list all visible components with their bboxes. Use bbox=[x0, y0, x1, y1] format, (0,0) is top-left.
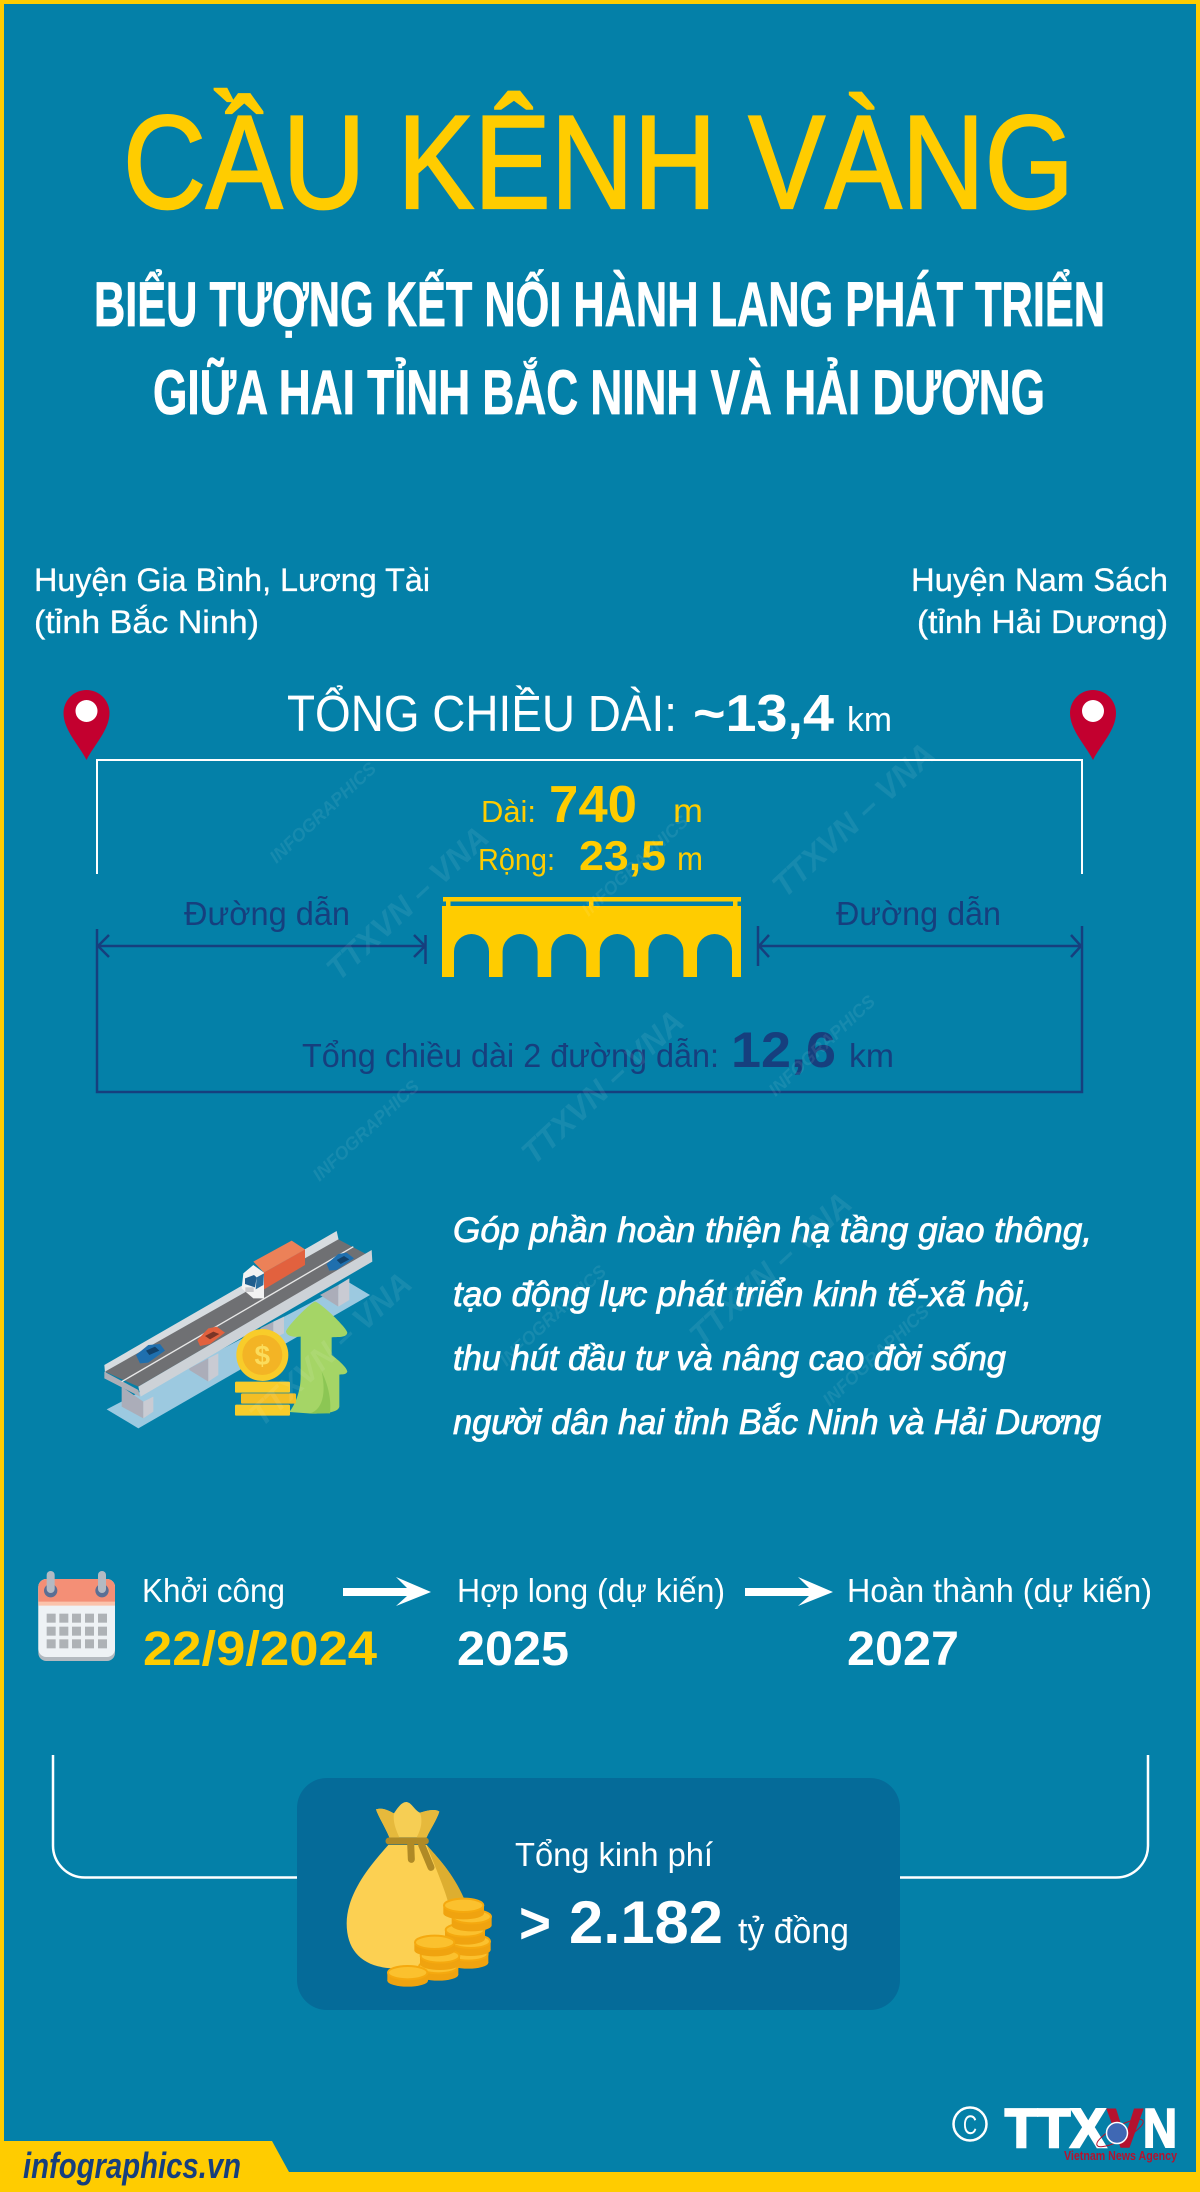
icon: right map pin bbox=[1070, 690, 1116, 760]
icon: left map pin bbox=[64, 690, 110, 760]
description text: người dân hai tỉnh Bắc Ninh và Hải Dương bbox=[453, 1403, 1102, 1442]
timeline: completion bbox=[847, 1572, 1152, 1676]
logo: TTXVN: Vietnam News Agency bbox=[1064, 2149, 1177, 2163]
approach total label: km bbox=[849, 1037, 894, 1074]
logo: TTXVN: TTX bbox=[1005, 2097, 1106, 2159]
approach total label bbox=[302, 1022, 894, 1078]
footer tab bbox=[0, 2141, 289, 2192]
total length bracket bbox=[97, 760, 1082, 874]
logo: TTXVN: N bbox=[1143, 2097, 1177, 2159]
bridge dimensions bbox=[478, 776, 703, 879]
budget text: tỷ đồng bbox=[738, 1910, 849, 1951]
watermarks bbox=[242, 736, 942, 1433]
budget text: > bbox=[519, 1891, 551, 1956]
left location label: Huyện Gia Bình, Lương Tài bbox=[34, 562, 430, 598]
logo: TTXVN: V bbox=[1107, 2097, 1143, 2159]
icon: money bag with coins bbox=[347, 1802, 492, 1987]
budget text bbox=[515, 1836, 849, 1956]
left location label bbox=[34, 562, 430, 640]
watermarks: INFOGRAPHICS bbox=[496, 1261, 610, 1370]
bridge dimensions: m bbox=[677, 840, 703, 877]
footer website: infographics.vn bbox=[23, 2145, 241, 2186]
watermarks: INFOGRAPHICS bbox=[578, 811, 692, 920]
arrow: start to closure bbox=[343, 1577, 431, 1606]
budget bracket bbox=[53, 1755, 1148, 1878]
total length label: TỔNG CHIỀU DÀI: bbox=[287, 684, 677, 742]
budget text: 2.182 bbox=[569, 1889, 723, 1956]
logo: TTXVN bbox=[954, 2097, 1177, 2163]
bridge dimensions: m bbox=[673, 792, 703, 829]
subtitle bbox=[94, 269, 1105, 428]
watermarks: INFOGRAPHICS bbox=[309, 1076, 423, 1185]
timeline: completion: 2027 bbox=[847, 1623, 959, 1676]
total length label: ~13,4 bbox=[693, 685, 834, 743]
description text: Góp phần hoàn thiện hạ tầng giao thông, bbox=[453, 1211, 1092, 1250]
bridge dimensions: Rộng: bbox=[478, 842, 555, 877]
icon: yellow arch bridge bbox=[442, 897, 741, 977]
watermarks: TTXVN – VNA bbox=[765, 736, 942, 904]
watermarks: TTXVN – VNA bbox=[682, 1185, 859, 1353]
approach total bracket bbox=[97, 926, 1082, 1092]
left approach arrow bbox=[97, 935, 426, 964]
bridge dimensions: 23,5 bbox=[579, 832, 666, 879]
panel: total budget bbox=[297, 1778, 900, 2010]
description text: thu hút đầu tư và nâng cao đời sống bbox=[453, 1339, 1007, 1378]
right location label: (tỉnh Hải Dương) bbox=[917, 604, 1168, 640]
approach total label: 12,6 bbox=[731, 1022, 836, 1078]
description text bbox=[453, 1211, 1102, 1442]
total length label: km bbox=[847, 701, 892, 739]
watermarks: INFOGRAPHICS bbox=[765, 991, 879, 1100]
left location label: (tỉnh Bắc Ninh) bbox=[34, 604, 259, 640]
illustration: overpass with truck, coins and growth arrow bbox=[104, 1231, 372, 1428]
left approach road label: Đường dẫn bbox=[184, 895, 350, 932]
approach total label: Tổng chiều dài 2 đường dẫn: bbox=[302, 1037, 719, 1074]
icon: calendar bbox=[38, 1571, 115, 1661]
title: CẦU KÊNH VÀNG bbox=[123, 88, 1074, 237]
timeline: start: Khởi công bbox=[142, 1572, 285, 1609]
timeline: closure bbox=[457, 1572, 725, 1676]
arrow: closure to completion bbox=[745, 1577, 833, 1606]
timeline: start: 22/9/2024 bbox=[143, 1623, 377, 1676]
right location label bbox=[911, 562, 1168, 640]
right location label: Huyện Nam Sách bbox=[911, 562, 1168, 598]
timeline: completion: Hoàn thành (dự kiến) bbox=[847, 1572, 1152, 1609]
timeline: start bbox=[142, 1572, 377, 1676]
watermarks: TTXVN – VNA bbox=[514, 1003, 691, 1171]
watermarks: INFOGRAPHICS bbox=[819, 1301, 933, 1410]
total length label bbox=[287, 684, 892, 743]
budget text: Tổng kinh phí bbox=[515, 1836, 713, 1873]
watermarks: TTXVN – VNA bbox=[242, 1265, 419, 1433]
right approach road label: Đường dẫn bbox=[836, 895, 1001, 932]
description text: tạo động lực phát triển kinh tế-xã hội, bbox=[453, 1275, 1032, 1314]
timeline: closure: 2025 bbox=[457, 1623, 569, 1676]
watermarks: TTXVN – VNA bbox=[319, 819, 496, 987]
bridge dimensions: Dài: bbox=[481, 794, 536, 829]
bridge dimensions: 740 bbox=[549, 776, 637, 834]
right approach arrow bbox=[758, 926, 1082, 966]
timeline: closure: Hợp long (dự kiến) bbox=[457, 1572, 725, 1609]
illustration: overpass with truck, coins and growth arrow: $ bbox=[255, 1340, 271, 1371]
watermarks: INFOGRAPHICS bbox=[266, 758, 380, 867]
logo: TTXVN: C bbox=[963, 2110, 977, 2140]
